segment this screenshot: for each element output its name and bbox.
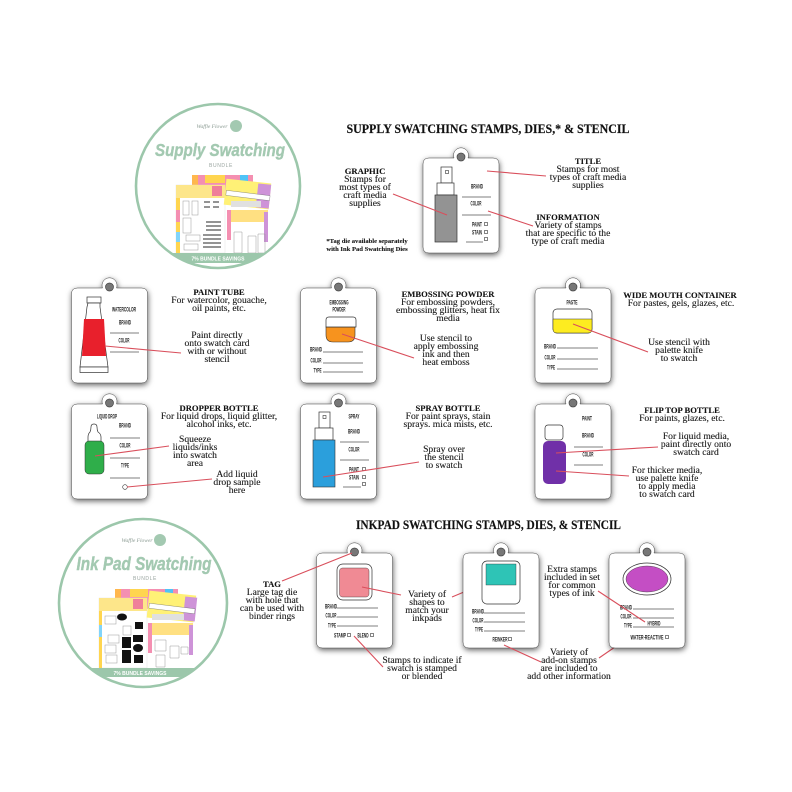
panel: paint tube tag bbox=[72, 278, 148, 383]
tag labels: TYPE bbox=[328, 622, 336, 630]
tag labels: BRAND bbox=[471, 184, 483, 190]
callout: use stencil palette: to swatch bbox=[661, 353, 697, 364]
callout: spray over: Spray over bbox=[423, 444, 466, 455]
tag labels: HYBRID bbox=[648, 620, 661, 628]
tag labels: COLOR bbox=[310, 358, 322, 364]
panel: ink pad tag square bbox=[316, 543, 392, 648]
callout: liquid media: For liquid media, bbox=[663, 431, 729, 442]
arrow: stamps to indicate bbox=[354, 636, 383, 667]
tag shape bbox=[535, 278, 611, 383]
tag labels: BRAND bbox=[310, 346, 322, 354]
callout: spray bottle bbox=[404, 403, 492, 430]
callout: title: supplies bbox=[572, 180, 604, 191]
tag labels: REINKER bbox=[492, 636, 508, 644]
callout: extra stamps: included in set bbox=[544, 572, 600, 583]
callout: extra stamps: types of ink bbox=[549, 588, 595, 599]
arrow: graphic bbox=[393, 194, 447, 215]
tag labels bbox=[544, 300, 598, 372]
tag labels bbox=[97, 414, 140, 489]
callout: liquid media bbox=[661, 431, 731, 458]
callout: extra stamps: Extra stamps bbox=[547, 564, 597, 575]
callout: squeeze: into swatch bbox=[173, 450, 217, 461]
callout: stamps to indicate: swatch is stamped bbox=[387, 663, 457, 674]
callout: tag: with hole that bbox=[246, 595, 299, 606]
panel: ink pad tag rectangular bbox=[463, 543, 539, 648]
tag labels: WATER-REACTIVE bbox=[630, 634, 664, 642]
product cards bbox=[88, 589, 198, 677]
callout: variety of shapes bbox=[405, 589, 450, 624]
panel: flip top bottle tag bbox=[535, 394, 611, 499]
arrow: add liquid bbox=[127, 479, 212, 487]
arrow: add-on left bbox=[504, 645, 541, 662]
heading: inkpad swatching: INKPAD SWATCHING STAMPS, DIES, & STENCIL bbox=[356, 517, 621, 532]
arrow: paint tube bbox=[105, 346, 181, 353]
logo: Waffle Flower bbox=[196, 123, 228, 130]
tag shape bbox=[300, 278, 376, 383]
callout: spray over: to swatch bbox=[426, 460, 462, 471]
arrow: shapes left bbox=[362, 587, 401, 595]
graphic: square ink pad bbox=[337, 564, 372, 600]
callout: paint directly: with or without bbox=[187, 346, 247, 357]
callout: paint tube: oil paints, etc. bbox=[192, 303, 246, 314]
tag labels bbox=[462, 184, 491, 242]
callout: paint directly: stencil bbox=[204, 354, 230, 365]
callout: paint tube: PAINT TUBE bbox=[193, 287, 245, 297]
callout: extra stamps: for common bbox=[548, 580, 596, 591]
callout: variety of shapes: Variety of bbox=[408, 589, 447, 600]
callout: stamps to indicate: or blended bbox=[402, 671, 443, 682]
callout: title: TITLE bbox=[575, 156, 601, 166]
callout: information: type of craft media bbox=[532, 236, 605, 247]
tag labels bbox=[574, 416, 603, 465]
tag labels: BLEND bbox=[358, 632, 369, 640]
callout: embossing powder bbox=[396, 289, 500, 324]
tag labels: PAINT bbox=[472, 222, 482, 228]
graphic: powder jar bbox=[326, 317, 356, 342]
arrow: spray bbox=[323, 462, 419, 477]
callout: information: INFORMATION bbox=[536, 212, 600, 222]
footnote: *Tag die available separately bbox=[326, 238, 408, 245]
callout: paint tube: For watercolor, gouache, bbox=[171, 295, 267, 306]
callout: embossing powder: For embossing powders, bbox=[401, 297, 495, 308]
product cards bbox=[165, 175, 273, 263]
tag labels: BRAND bbox=[119, 320, 131, 326]
arrow: liquid media bbox=[556, 447, 658, 453]
callout: information: that are specific to the bbox=[526, 228, 610, 239]
arrow: extra stamps bbox=[598, 591, 645, 622]
graphic: oval ink pad bbox=[623, 563, 671, 595]
callout: add-on stamps: Variety of bbox=[550, 647, 589, 658]
callout: thicker media: to swatch card bbox=[639, 489, 695, 500]
callout: embossing powder: embossing glitters, heat fix bbox=[396, 305, 500, 316]
tag shape bbox=[463, 543, 539, 648]
tag labels: COLOR bbox=[470, 200, 482, 208]
tag labels: BRAND bbox=[582, 432, 594, 440]
tag labels: COLOR bbox=[544, 354, 556, 362]
tag labels: STAMP bbox=[334, 632, 346, 640]
tag labels: BRAND bbox=[620, 604, 632, 612]
logo bbox=[121, 534, 166, 546]
tag labels bbox=[340, 414, 369, 487]
callout: use stencil emboss: heat emboss bbox=[422, 357, 470, 368]
callout: tag: Large tag die bbox=[247, 587, 297, 598]
callout: use stencil emboss: apply embossing bbox=[414, 341, 479, 352]
tag labels: PASTE bbox=[566, 300, 578, 306]
tag labels: COLOR bbox=[620, 614, 632, 620]
bundle title: Ink Pad Swatching bbox=[76, 554, 212, 574]
tag labels: COLOR bbox=[326, 612, 337, 620]
callout: embossing powder: EMBOSSING POWDER bbox=[402, 289, 495, 299]
panel: ink pad swatching bundle badge bbox=[59, 519, 227, 687]
arrow: wide mouth bbox=[573, 324, 648, 352]
tag shape bbox=[423, 148, 499, 253]
callout: squeeze: liquids/inks bbox=[173, 442, 218, 453]
callout: thicker media: use palette knife bbox=[636, 473, 698, 484]
callout: spray bottle: sprays. mica mists, etc. bbox=[404, 419, 492, 430]
tag labels bbox=[325, 604, 378, 640]
callout: dropper bottle: DROPPER BOTTLE bbox=[179, 403, 259, 413]
callout: graphic: supplies bbox=[349, 198, 381, 209]
bundle title: Supply Swatching bbox=[155, 140, 285, 160]
callout: liquid media: swatch card bbox=[673, 447, 719, 458]
callout: add-on stamps: add other information bbox=[527, 671, 611, 682]
tag shape bbox=[72, 278, 148, 383]
tag labels bbox=[620, 604, 674, 642]
callout: variety of shapes: match your bbox=[405, 605, 450, 616]
callout: dropper bottle: For liquid drops, liquid glitter, bbox=[161, 411, 277, 422]
arrow: embossing bbox=[342, 334, 414, 358]
callout: thicker media bbox=[632, 465, 702, 500]
tag labels: PAINT bbox=[349, 466, 359, 474]
callout: graphic: GRAPHIC bbox=[345, 166, 385, 176]
callout: use stencil palette: Use stencil with bbox=[648, 337, 710, 348]
graphic: spray bottle bbox=[435, 167, 457, 242]
tag labels: BRAND bbox=[119, 422, 131, 430]
tag labels: STAIN bbox=[349, 474, 359, 482]
callout: use stencil emboss bbox=[414, 333, 479, 368]
tag labels: TYPE bbox=[475, 626, 483, 634]
callout: spray bottle: For paint sprays, stain bbox=[406, 411, 491, 422]
arrow: shapes right bbox=[452, 579, 495, 597]
callout: paint directly: Paint directly bbox=[191, 330, 243, 341]
callout: tag: can be used with bbox=[240, 603, 304, 614]
tag labels: TYPE bbox=[624, 622, 632, 630]
arrow: title bbox=[487, 171, 546, 176]
callout: graphic: Stamps for bbox=[344, 174, 387, 185]
tag shape bbox=[316, 543, 392, 648]
savings band text: 7% BUNDLE SAVINGS bbox=[192, 256, 245, 262]
tag labels: POWDER bbox=[332, 306, 346, 314]
callout: tag: TAG bbox=[263, 579, 281, 589]
callout: embossing powder: media bbox=[436, 313, 460, 324]
logo bbox=[196, 120, 242, 132]
callout: dropper bottle: alcohol inks, etc. bbox=[186, 419, 252, 430]
tag labels: TYPE bbox=[547, 364, 555, 372]
callout: use stencil palette bbox=[648, 337, 710, 364]
callout: thicker media: to apply media bbox=[638, 481, 696, 492]
callout: graphic: most types of bbox=[339, 182, 392, 193]
callout: squeeze bbox=[173, 434, 218, 469]
graphic: dropper bottle bbox=[85, 424, 104, 474]
tag labels: STAIN bbox=[472, 230, 482, 236]
callout: spray bottle: SPRAY BOTTLE bbox=[415, 403, 481, 413]
callout: flip top bottle bbox=[639, 405, 725, 424]
graphic: flip top bottle bbox=[543, 425, 566, 484]
savings band text: 7% BUNDLE SAVINGS bbox=[114, 671, 167, 677]
panel: embossing powder tag bbox=[300, 278, 376, 383]
callout: wide mouth container: For pastes, gels, glazes, etc. bbox=[628, 298, 734, 309]
callout: variety of shapes: inkpads bbox=[412, 613, 442, 624]
callout: flip top bottle: For paints, glazes, etc. bbox=[639, 413, 725, 424]
tag shape bbox=[300, 394, 376, 499]
graphic: rectangular ink pad bbox=[482, 561, 520, 604]
callout: add-on stamps: are included to bbox=[540, 663, 598, 674]
tag labels: BRAND bbox=[348, 428, 360, 436]
callout: thicker media: For thicker media, bbox=[632, 465, 702, 476]
callout: add-on stamps bbox=[527, 647, 611, 682]
callout: use stencil emboss: ink and then bbox=[422, 349, 470, 360]
panel: supply swatching bundle badge bbox=[136, 104, 300, 268]
tag labels: TYPE bbox=[121, 462, 129, 470]
panel: dropper bottle tag bbox=[72, 394, 148, 499]
tag labels: EMBOSSING bbox=[330, 300, 348, 306]
callout: stamps to indicate bbox=[382, 655, 462, 682]
tag labels bbox=[310, 300, 363, 374]
callout: add liquid: here bbox=[229, 485, 245, 496]
callout: add liquid: Add liquid bbox=[216, 469, 258, 480]
callout: liquid media: paint directly onto bbox=[661, 439, 731, 450]
panel: wide mouth container tag bbox=[535, 278, 611, 383]
graphic: spray bottle bbox=[313, 412, 335, 487]
arrow: add-on right bbox=[599, 638, 628, 658]
callout: use stencil emboss: Use stencil to bbox=[420, 333, 472, 344]
callout: paint directly: onto swatch card bbox=[184, 338, 250, 349]
callout: add liquid: drop sample bbox=[213, 477, 261, 488]
callout: title bbox=[550, 156, 627, 191]
tag labels: COLOR bbox=[118, 338, 130, 344]
tag labels bbox=[110, 306, 139, 352]
arrow: thicker media bbox=[556, 471, 629, 476]
heading: supply swatching: SUPPLY SWATCHING STAMPS, DIES,* & STENCIL bbox=[346, 121, 630, 136]
callout: wide mouth container: WIDE MOUTH CONTAINER bbox=[623, 290, 738, 300]
tag labels: LIQUID DROP bbox=[97, 414, 117, 420]
tag labels: COLOR bbox=[348, 446, 360, 454]
graphic: paint tube bbox=[80, 297, 108, 372]
bundle subtitle: BUNDLE bbox=[133, 576, 157, 582]
panel: spray bottle tag bbox=[300, 394, 376, 499]
tag labels: WATERCOLOR bbox=[112, 306, 136, 314]
callout: title: Stamps for most bbox=[557, 164, 620, 175]
callout: add liquid bbox=[213, 469, 261, 496]
tag labels: PAINT bbox=[582, 416, 592, 422]
callout: extra stamps bbox=[544, 564, 600, 599]
callout: flip top bottle: FLIP TOP BOTTLE bbox=[644, 405, 720, 415]
tag labels: BRAND bbox=[472, 608, 484, 616]
arrow: information bbox=[488, 211, 533, 226]
callout: spray over bbox=[423, 444, 466, 471]
logo: Waffle Flower bbox=[121, 537, 153, 544]
callout: squeeze: Squeeze bbox=[179, 434, 211, 445]
callout: variety of shapes: shapes to bbox=[409, 597, 445, 608]
footnote: with Ink Pad Swatching Dies bbox=[326, 246, 408, 253]
callout: spray over: the stencil bbox=[424, 452, 464, 463]
panel: ink pad tag oval bbox=[609, 543, 685, 648]
tag labels: COLOR bbox=[582, 452, 594, 458]
callout: information bbox=[526, 212, 610, 247]
tag labels: COLOR bbox=[120, 442, 131, 450]
callout: information: Variety of stamps bbox=[534, 220, 602, 231]
callout: tag: binder rings bbox=[249, 611, 295, 622]
tag labels bbox=[472, 608, 525, 644]
callout: add-on stamps: add-on stamps bbox=[541, 655, 597, 666]
arrow: tag bbox=[282, 553, 352, 581]
callout: graphic bbox=[339, 166, 392, 209]
tag labels: COLOR bbox=[472, 618, 484, 624]
tag labels: SPRAY bbox=[348, 414, 360, 420]
tag labels: BRAND bbox=[325, 604, 337, 610]
callout: stamps to indicate: Stamps to indicate if bbox=[382, 655, 462, 666]
footnote bbox=[326, 238, 408, 253]
tag shape bbox=[535, 394, 611, 499]
callout: wide mouth container bbox=[623, 290, 738, 309]
tag shape bbox=[609, 543, 685, 648]
callout: use stencil palette: palette knife bbox=[655, 345, 703, 356]
graphic: paste jar bbox=[553, 309, 592, 333]
panel: spray anatomy tag bbox=[423, 148, 499, 253]
callout: title: types of craft media bbox=[550, 172, 627, 183]
arrow: squeeze bbox=[95, 446, 169, 456]
tag labels: BRAND bbox=[544, 344, 556, 350]
tag shape bbox=[72, 394, 148, 499]
callout: tag bbox=[240, 579, 304, 622]
callout: paint directly bbox=[184, 330, 250, 365]
callout: squeeze: area bbox=[187, 458, 204, 469]
callout: graphic: craft media bbox=[343, 190, 387, 201]
tag labels: TYPE bbox=[314, 368, 322, 374]
bundle subtitle: BUNDLE bbox=[209, 163, 233, 169]
callout: dropper bottle bbox=[161, 403, 277, 430]
callout: paint tube bbox=[171, 287, 267, 314]
